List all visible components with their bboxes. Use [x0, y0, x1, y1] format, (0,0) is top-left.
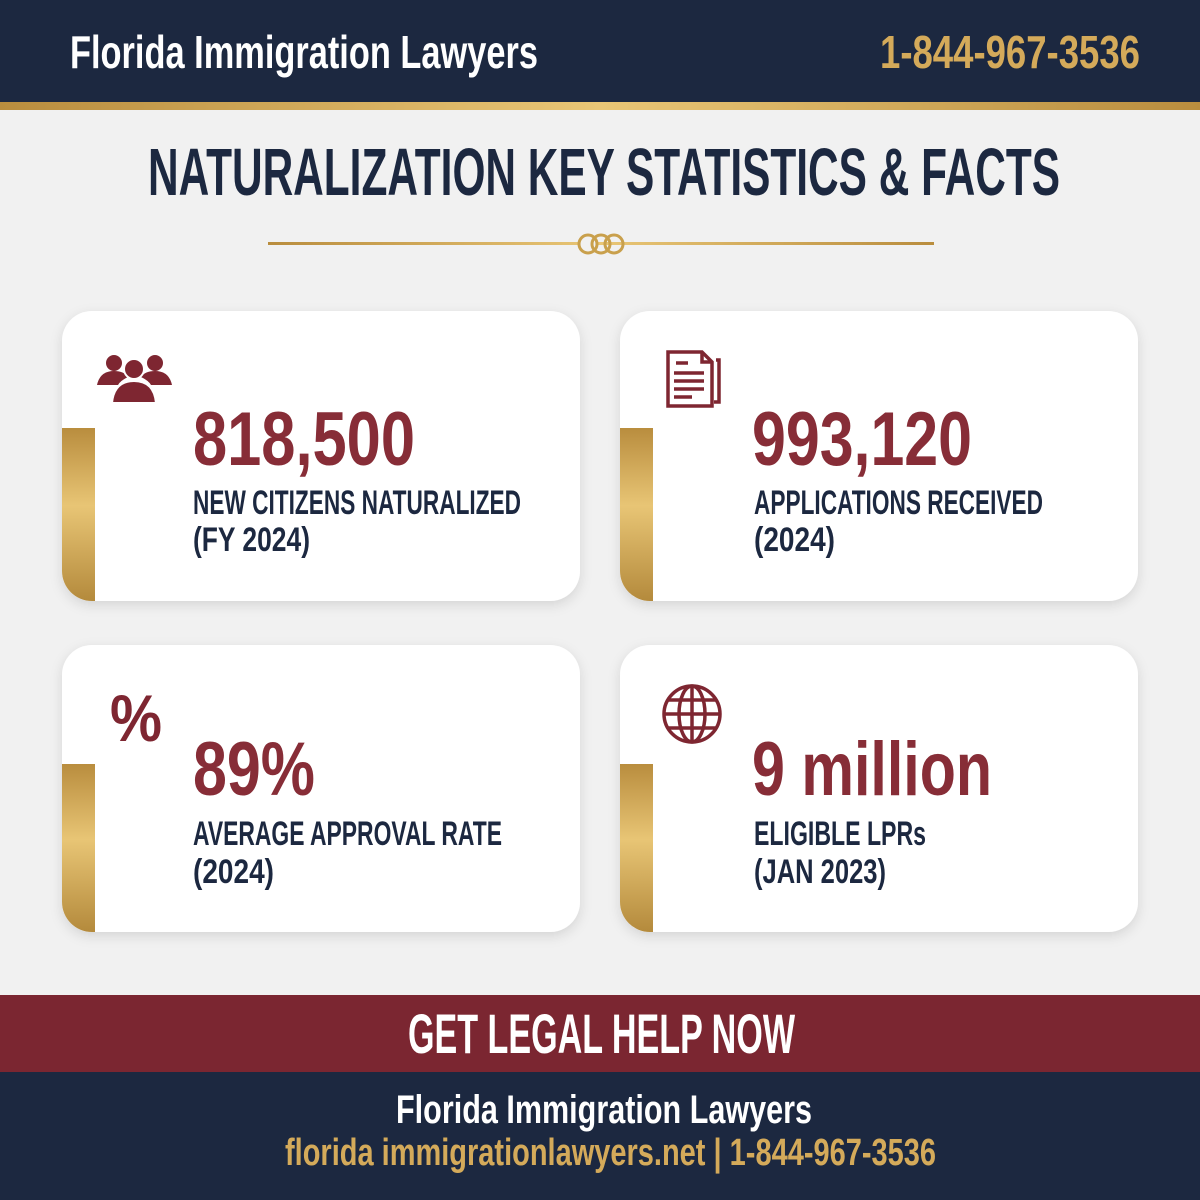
card: approval rate	[62, 645, 580, 932]
header brand name: Florida Immigration Lawyers	[70, 26, 538, 78]
stat label: (2024)	[193, 853, 274, 891]
header phone: 1-844-967-3536	[880, 26, 1140, 78]
CTA banner: GET LEGAL HELP NOW	[408, 1002, 795, 1065]
stat label	[193, 815, 502, 891]
stat label	[754, 484, 1043, 559]
stat label	[754, 815, 926, 891]
card: applications	[620, 311, 1138, 601]
stat number: 818,500	[193, 397, 415, 482]
stat label: (JAN 2023)	[754, 853, 886, 891]
icon: people	[97, 355, 172, 403]
footer	[0, 1072, 1200, 1200]
stat label: NEW CITIZENS NATURALIZED	[193, 484, 521, 522]
stat number: 9 million	[752, 727, 992, 812]
stat number: 89%	[193, 727, 315, 812]
card: eligible LPRs	[620, 645, 1138, 932]
footer brand: Florida Immigration Lawyers	[396, 1088, 812, 1132]
stat label: (FY 2024)	[193, 521, 310, 559]
divider ornament	[268, 235, 934, 253]
card: new citizens	[62, 311, 580, 601]
CTA banner	[0, 995, 1200, 1072]
icon: document	[668, 352, 719, 406]
stat number: 993,120	[752, 397, 972, 482]
stat label: APPLICATIONS RECEIVED	[754, 484, 1043, 522]
header bar	[0, 0, 1200, 110]
stat label: AVERAGE APPROVAL RATE	[193, 815, 502, 853]
footer contact: florida immigrationlawyers.net | 1-844-967-3536	[285, 1132, 936, 1174]
stat label	[193, 484, 521, 559]
stat label: (2024)	[754, 521, 835, 559]
icon: percent: %	[110, 681, 162, 755]
icon: globe	[664, 686, 720, 742]
stat label: ELIGIBLE LPRs	[754, 815, 926, 853]
